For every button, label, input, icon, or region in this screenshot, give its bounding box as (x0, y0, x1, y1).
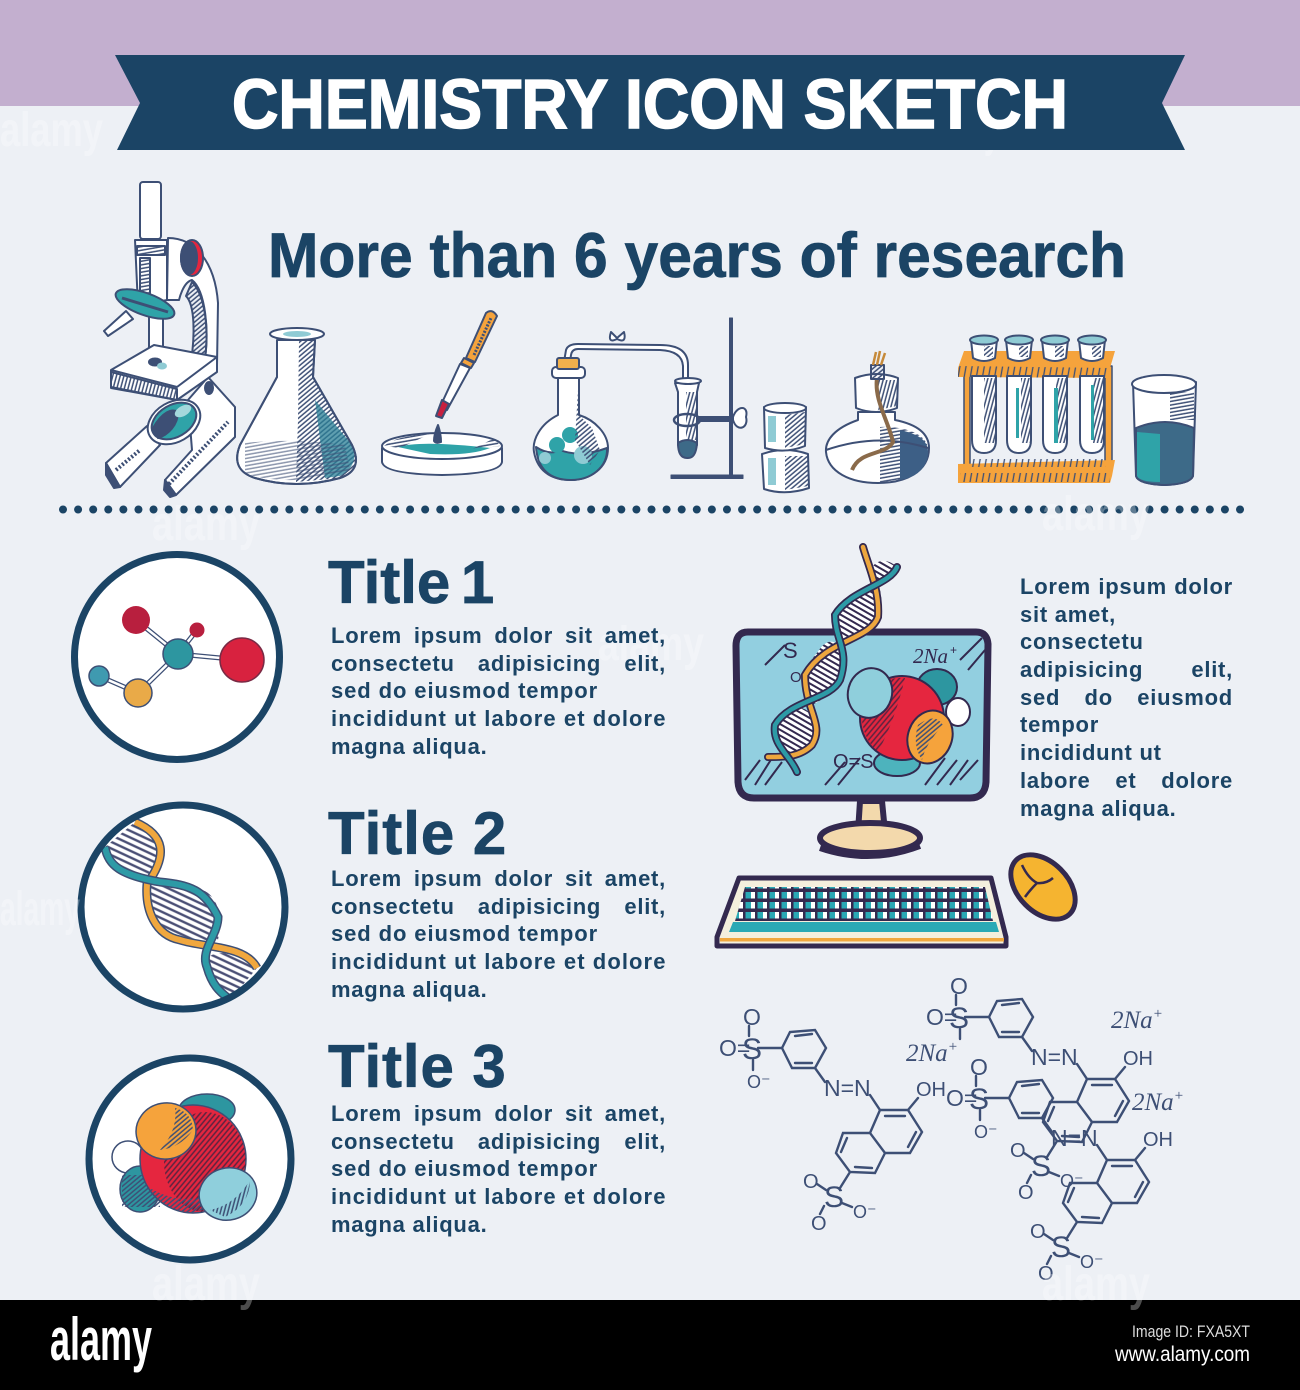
monitor: S (783, 638, 798, 663)
chemical formula: top right: O⁻ (1060, 1171, 1084, 1191)
chemical formula: left (719, 1004, 946, 1235)
icon: beaker (1132, 375, 1196, 485)
text block 3 (331, 1101, 667, 1237)
chemical formula: bottom right (946, 1054, 1173, 1285)
chemical formula: left: O= (719, 1035, 750, 1061)
chemical formula: bottom right: S (969, 1083, 989, 1116)
chemical formula: top right: S (949, 1002, 969, 1035)
text block 2: magna aliqua. (331, 977, 487, 1002)
keyboard (717, 878, 1006, 946)
icon: conical flask (237, 328, 356, 484)
chemical formula: top right: S (1031, 1150, 1051, 1183)
watermarks: alamy (0, 883, 80, 936)
text block: computer description: incididunt ut (1020, 740, 1162, 765)
text block 2 (331, 866, 667, 1002)
chemical formula: left: O⁻ (747, 1072, 771, 1092)
chemical formula: bottom right: O (970, 1054, 988, 1080)
sodium labels: 2Na (1132, 1089, 1174, 1116)
sodium labels: 2Na (906, 1040, 948, 1067)
chemical formula: top right: O (950, 973, 968, 999)
chemical formula: left: OH (916, 1079, 946, 1101)
chemical formula: left: O (743, 1004, 761, 1030)
text block 2: consectetu adipisicing elit, (331, 894, 666, 919)
watermarks behind ribbon (0, 104, 1000, 157)
icon: test tube rack (958, 336, 1115, 483)
sodium labels: 2Na (1111, 1007, 1153, 1034)
heading: More than 6 years of research (268, 221, 1126, 291)
chemical formula: top right: O (1010, 1140, 1026, 1162)
icon: distillation apparatus (534, 318, 746, 480)
watermarks: alamy (598, 618, 704, 671)
chemical formula: bottom right: O= (946, 1085, 977, 1111)
text block 3: Lorem ipsum dolor sit amet, (331, 1101, 666, 1126)
icon: cotton cylinders (762, 403, 809, 492)
text block: computer description: sed do eiusmod (1020, 685, 1233, 710)
title 1: Title 1 (328, 549, 494, 616)
watermarks: alamy (1042, 1258, 1150, 1311)
text block 1: magna aliqua. (331, 734, 487, 759)
title 3: Title 3 (328, 1033, 507, 1100)
monitor: O (790, 669, 802, 686)
text block: computer description: sit amet, (1020, 602, 1116, 627)
chemical formula: left: S (742, 1033, 762, 1066)
title 2: Title 2 (328, 800, 507, 867)
text block 2: incididunt ut labore et dolore (331, 949, 667, 974)
monitor: 2Na (913, 644, 948, 668)
text block: computer description: Lorem ipsum dolor (1020, 574, 1233, 599)
sodium labels: + (1174, 1088, 1184, 1104)
text block 3: consectetu adipisicing elit, (331, 1129, 666, 1154)
panel: molecule circle (74, 554, 280, 760)
footer bar (0, 1300, 1300, 1390)
chemical formula: left: O (811, 1213, 827, 1235)
text block 2: Lorem ipsum dolor sit amet, (331, 866, 666, 891)
top lilac band (0, 0, 1300, 106)
monitor: + (950, 643, 957, 657)
icon: dropper over petri dish (382, 311, 502, 475)
text block 3: sed do eiusmod tempor (331, 1156, 598, 1181)
icon: alcohol burner (826, 351, 929, 483)
icon: computer with DNA and molecule (717, 547, 1088, 946)
sodium labels: + (1153, 1006, 1163, 1022)
chemical formula: left: O (803, 1171, 819, 1193)
footer logo: alamy (50, 1306, 152, 1373)
chemical formula: top right: O= (926, 1004, 957, 1030)
watermarks (0, 488, 1150, 1311)
monitor: O=S (833, 751, 874, 773)
sodium labels: + (948, 1039, 958, 1055)
icon: microscope (104, 182, 235, 497)
text block: computer description: magna aliqua. (1020, 796, 1176, 820)
monitor (736, 632, 988, 798)
text block 3: magna aliqua. (331, 1212, 487, 1237)
text block: computer description: tempor (1020, 712, 1099, 737)
chemical formula: left: O⁻ (853, 1202, 877, 1222)
chemical formula: bottom right: O (1030, 1221, 1046, 1243)
text block 1: sed do eiusmod tempor (331, 678, 598, 703)
text block: computer description (1020, 574, 1233, 820)
text block: computer description: adipisicing elit, (1020, 657, 1233, 682)
chemical formula: bottom right: OH (1143, 1129, 1173, 1151)
panel: DNA circle (81, 805, 285, 1009)
monitor stand (820, 801, 920, 856)
chemical formula: top right (926, 973, 1153, 1204)
chemical formula: top right: N=N (1031, 1044, 1078, 1070)
text block 1: consectetu adipisicing elit, (331, 651, 666, 676)
chemical formula: bottom right: O⁻ (974, 1122, 998, 1142)
sodium labels (906, 1006, 1184, 1116)
chemical formula: bottom right: N=N (1051, 1125, 1098, 1151)
text block: computer description: labore et dolore (1020, 768, 1233, 793)
watermarks behind ribbon: alamy (0, 104, 103, 157)
text block: computer description: consectetu (1020, 629, 1144, 654)
watermarks: alamy (1042, 488, 1150, 541)
molecule on screen (842, 663, 970, 776)
chemical formula: bottom right: O⁻ (1080, 1252, 1104, 1272)
footer url: www.alamy.com (1114, 1343, 1250, 1366)
title: CHEMISTRY ICON SKETCH (232, 65, 1068, 143)
chemical formula: left: S (824, 1181, 844, 1214)
chemical formula: bottom right: S (1051, 1231, 1071, 1264)
watermarks: alamy (152, 1258, 260, 1311)
panel: atom cluster circle (89, 1058, 291, 1260)
dotted divider (63, 506, 1241, 514)
chemical formula: top right: OH (1123, 1048, 1153, 1070)
title ribbon (115, 55, 1185, 150)
DNA on screen (768, 547, 897, 772)
text block 1: incididunt ut labore et dolore (331, 706, 667, 731)
mouse (998, 842, 1088, 932)
text block 2: sed do eiusmod tempor (331, 921, 598, 946)
text block 3: incididunt ut labore et dolore (331, 1184, 667, 1209)
text block 1: Lorem ipsum dolor sit amet, (331, 623, 666, 648)
watermarks: alamy (152, 498, 260, 551)
watermarks behind ribbon: alamy (918, 104, 1000, 157)
footer image id: Image ID: FXA5XT (1132, 1322, 1250, 1341)
chemical formula: bottom right: O (1038, 1263, 1054, 1285)
text block 1 (331, 623, 667, 759)
chemical formula: top right: O (1018, 1182, 1034, 1204)
chemical formula: left: N=N (824, 1075, 871, 1101)
